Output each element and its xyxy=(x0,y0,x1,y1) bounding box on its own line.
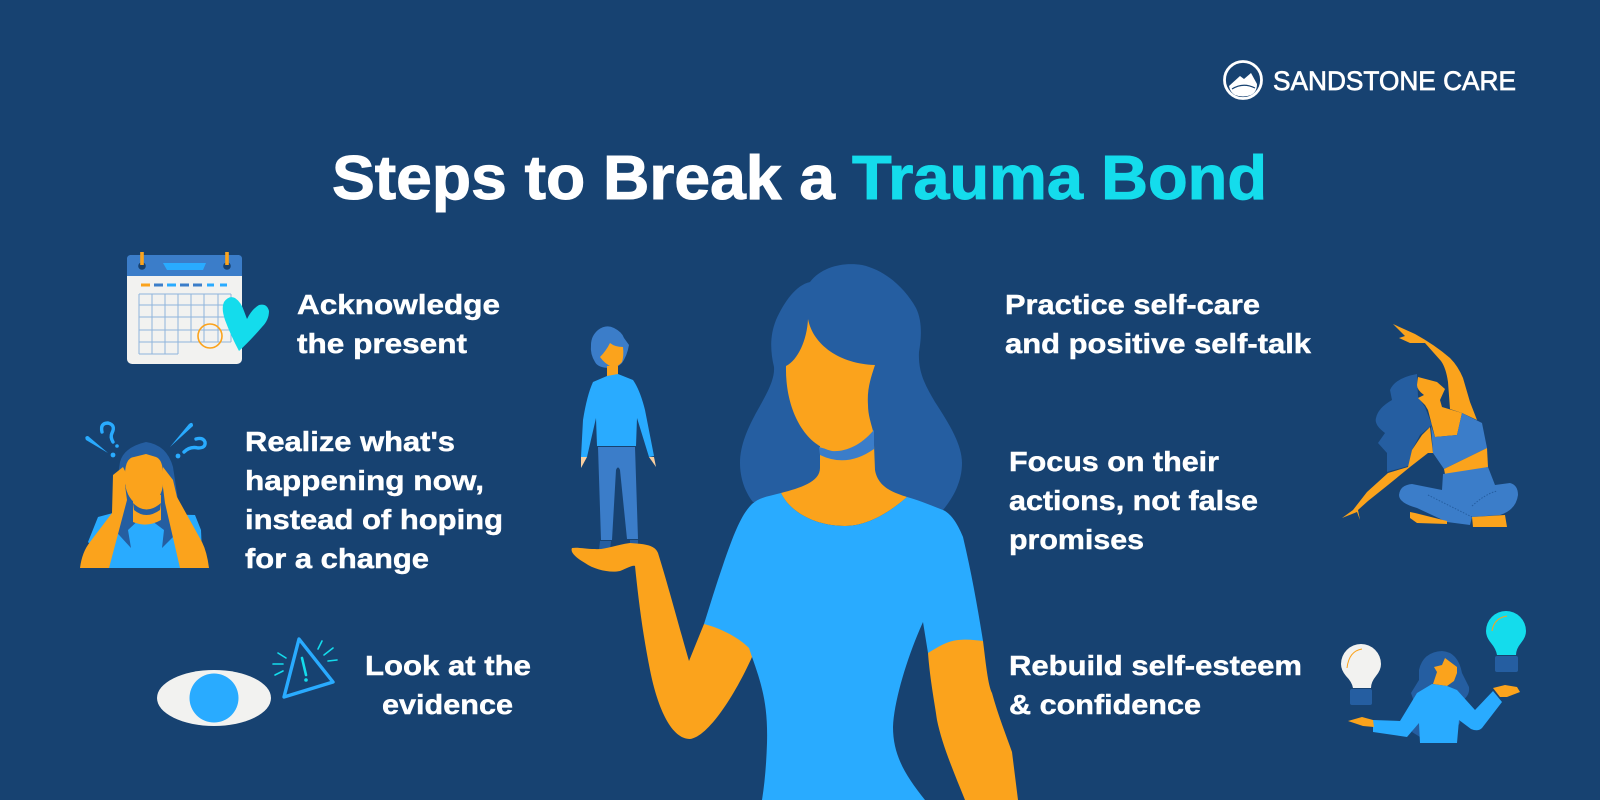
title xyxy=(332,144,1267,213)
right arm xyxy=(928,640,1018,800)
text: realize what's happening now: for a change xyxy=(245,543,429,574)
icon: calendar with heart xyxy=(127,252,269,364)
icon: stressed woman xyxy=(80,423,209,568)
text: realize what's happening now: Realize what's xyxy=(245,426,455,457)
text: acknowledge the present: Acknowledge xyxy=(297,289,500,320)
choker xyxy=(819,430,874,460)
text: focus on their actions: actions, not false xyxy=(1009,485,1258,516)
text: look at the evidence: evidence xyxy=(382,689,513,720)
face xyxy=(786,319,875,451)
icon: woman balancing light bulbs xyxy=(1341,611,1526,743)
text: focus on their actions: Focus on their xyxy=(1009,446,1219,477)
text: acknowledge the present: the present xyxy=(297,328,467,359)
text: rebuild self-esteem: Rebuild self-esteem xyxy=(1009,650,1302,681)
hair xyxy=(740,264,962,510)
title: Trauma Bond xyxy=(852,144,1267,213)
text: practice self-care: and positive self-talk xyxy=(1005,328,1311,359)
text: rebuild self-esteem: & confidence xyxy=(1009,689,1201,720)
text: focus on their actions xyxy=(1009,446,1258,555)
text: realize what's happening now xyxy=(245,426,503,574)
illustration: large woman xyxy=(572,264,1018,800)
text: realize what's happening now: instead of hoping xyxy=(245,504,503,535)
neck and chest xyxy=(781,445,907,526)
illustration: small man standing on hand xyxy=(581,326,656,550)
shirt xyxy=(704,493,983,800)
logo: Sandstone Care xyxy=(1224,62,1516,98)
icon: eye and warning sign xyxy=(157,639,337,726)
logo: Sandstone Care: SANDSTONE CARE xyxy=(1273,66,1516,96)
left arm and hand xyxy=(572,543,752,739)
text: realize what's happening now: happening now, xyxy=(245,465,484,496)
text: practice self-care: Practice self-care xyxy=(1005,289,1260,320)
title: Steps to Break a xyxy=(332,144,836,213)
text: rebuild self-esteem xyxy=(1009,650,1302,720)
text: focus on their actions: promises xyxy=(1009,524,1144,555)
text: look at the evidence xyxy=(365,650,531,720)
text: practice self-care xyxy=(1005,289,1311,359)
text: acknowledge the present xyxy=(297,289,500,359)
text: look at the evidence: Look at the xyxy=(365,650,531,681)
icon: yoga woman xyxy=(1342,324,1518,527)
